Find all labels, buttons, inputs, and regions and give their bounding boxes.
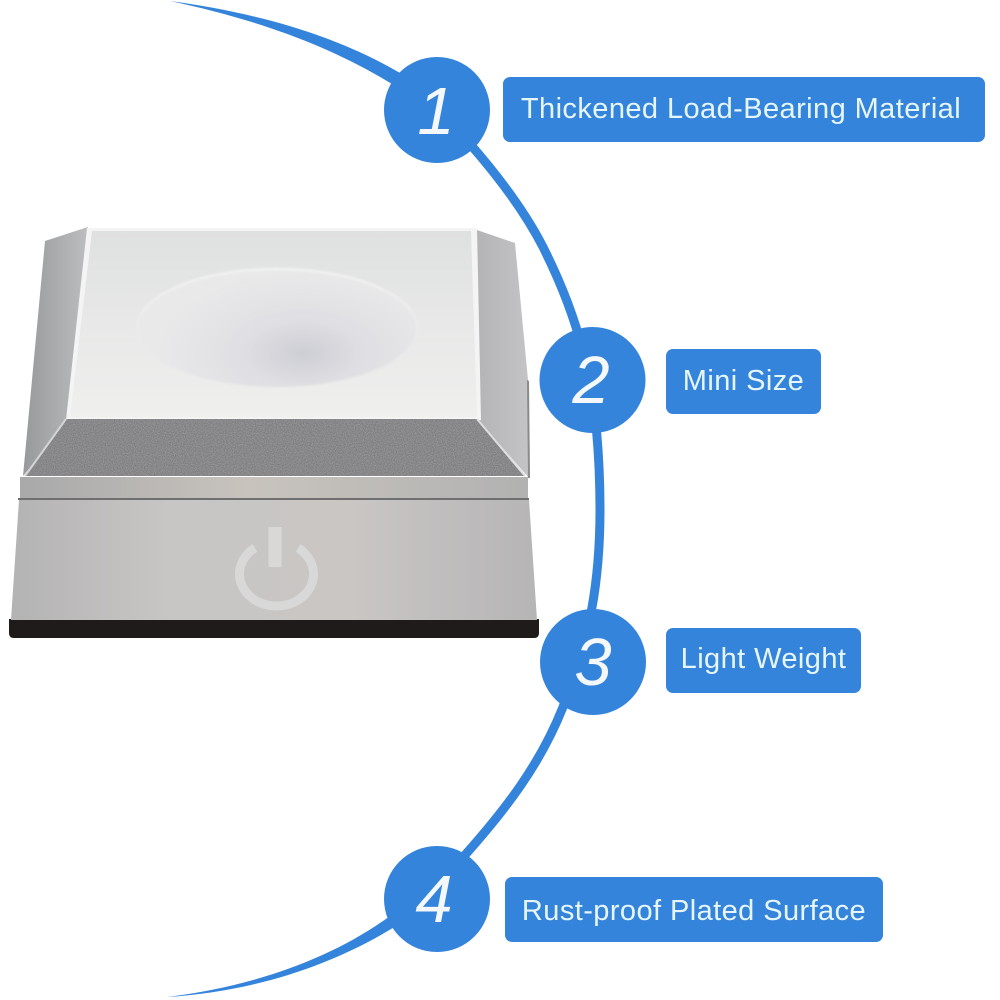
label 4 bbox=[505, 877, 883, 942]
label 2 bbox=[666, 349, 821, 414]
marker 3: 3 bbox=[574, 625, 612, 700]
label 1 bbox=[503, 77, 985, 142]
left bevel bbox=[23, 227, 88, 476]
label 3 bbox=[666, 628, 861, 693]
top frosted panel frame bbox=[66, 228, 481, 420]
diagram: product and numbered arc bbox=[9, 1, 646, 997]
right bevel bbox=[474, 229, 529, 478]
marker 2 bbox=[540, 327, 646, 433]
marker 1 bbox=[384, 57, 490, 163]
marker 4 bbox=[384, 846, 490, 952]
front sloped face bbox=[24, 418, 526, 476]
label 1: Thickened Load-Bearing Material bbox=[521, 93, 961, 125]
label 3: Light Weight bbox=[681, 643, 846, 675]
arc middle bbox=[465, 144, 600, 855]
marker 2: 2 bbox=[571, 343, 610, 418]
icon: power symbol bbox=[240, 527, 314, 606]
marker 3 bbox=[540, 609, 646, 715]
marker 4: 4 bbox=[415, 862, 453, 937]
base black foot bbox=[9, 619, 539, 638]
label 2: Mini Size bbox=[683, 365, 804, 397]
label 4: Rust-proof Plated Surface bbox=[522, 894, 866, 926]
chrome band bbox=[20, 477, 528, 498]
front panel bbox=[11, 500, 537, 620]
arc lower taper bbox=[167, 916, 396, 997]
top frosted panel bbox=[70, 231, 477, 417]
marker 1: 1 bbox=[417, 74, 455, 149]
arc upper taper bbox=[170, 1, 400, 84]
blue arc bbox=[167, 1, 600, 997]
product: LED base bbox=[9, 227, 539, 638]
lens dish bbox=[137, 269, 417, 387]
